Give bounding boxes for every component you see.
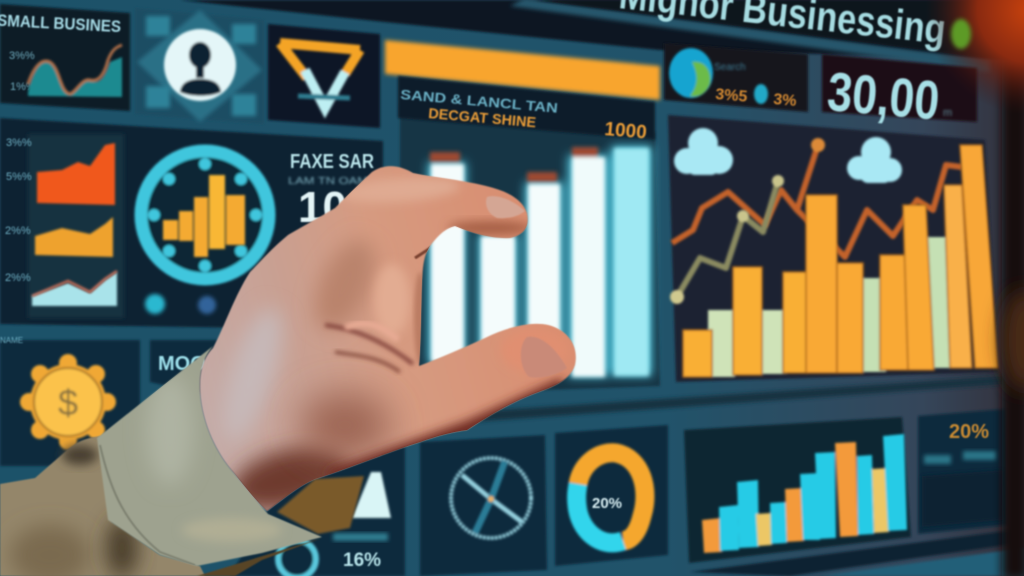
caption xyxy=(333,533,388,541)
panel: bar chart xyxy=(385,40,660,395)
panel: metric charts and gear xyxy=(0,118,383,330)
diamond ornament xyxy=(137,10,262,122)
orange heading band xyxy=(385,40,660,100)
bars xyxy=(702,434,907,553)
chart: yellow area xyxy=(35,217,113,257)
palm crease xyxy=(325,325,413,364)
hand shading xyxy=(209,174,569,521)
icon: green status dot xyxy=(951,19,971,49)
bar cluster in gear xyxy=(163,175,245,257)
chart: blue area trend line xyxy=(32,271,117,296)
side inner dark xyxy=(922,470,1004,527)
icon: thumb nail xyxy=(521,337,567,378)
chart: donut xyxy=(577,453,645,543)
sleeve body xyxy=(0,436,205,576)
right edge shade xyxy=(1002,60,1024,576)
cuff xyxy=(97,346,322,566)
shirt sleeve xyxy=(0,346,364,576)
big value: 30,00 xyxy=(825,60,942,132)
orange trend line xyxy=(672,138,962,257)
hand xyxy=(200,166,576,521)
axis labels column: 3%% xyxy=(6,137,32,149)
icon: progress ring xyxy=(278,540,316,576)
panel: mood label xyxy=(150,340,235,400)
icon: cloud left xyxy=(674,128,733,175)
panel: small percent xyxy=(230,445,405,576)
axis labels column: 2%% xyxy=(5,225,31,237)
chart subheading: SAND & LANCL TAN xyxy=(400,86,559,116)
heading: MOO xyxy=(158,353,206,375)
bars xyxy=(683,145,998,377)
sleeve lower shade xyxy=(10,525,90,576)
chart: blue area xyxy=(32,272,117,306)
globe label: Search xyxy=(714,62,746,73)
axis labels column xyxy=(5,137,32,284)
inner chart column xyxy=(28,134,124,318)
corner tile icons xyxy=(146,16,256,116)
axis labels column: 5%% xyxy=(6,171,32,183)
side value: 20% xyxy=(949,421,989,443)
bottom right dark gap xyxy=(690,530,1014,576)
side large number: 10 xyxy=(298,183,347,232)
panel: globe xyxy=(664,43,808,112)
chart value: 1000 xyxy=(604,119,648,144)
sleeve inner lining xyxy=(277,476,364,534)
icon: cloud right xyxy=(847,137,902,183)
panel: donut xyxy=(555,425,668,566)
percent value: 16% xyxy=(343,550,381,571)
title divider bar xyxy=(510,0,990,72)
sleeve underside xyxy=(197,538,322,576)
label: NAME xyxy=(0,336,23,345)
panel: triangle logo xyxy=(268,24,380,128)
icon: gauge dial xyxy=(451,458,531,538)
axis labels column: 2%% xyxy=(5,272,31,284)
donut value: 20% xyxy=(592,495,622,512)
icon: gear ring xyxy=(141,151,269,279)
khaki trend line xyxy=(670,175,784,304)
area line chart xyxy=(28,45,122,97)
status dots xyxy=(145,294,165,314)
icon: orange and white triangle xyxy=(280,43,360,108)
second axis label: 1%% xyxy=(10,81,36,93)
globe value right: 3% xyxy=(773,91,797,110)
panel: small bar chart xyxy=(684,417,911,563)
icon: cone xyxy=(352,472,391,518)
side label row xyxy=(924,451,996,464)
globe value left: 3%5 xyxy=(715,86,748,106)
panel: side metric xyxy=(918,409,1008,534)
panel: profile xyxy=(135,8,264,124)
icon: user avatar xyxy=(164,29,236,101)
panel: big number xyxy=(822,54,977,132)
dark top band xyxy=(180,0,1024,60)
panel heading: SMALL BUSINES xyxy=(0,11,121,36)
dark stripe below chart row xyxy=(470,376,1005,422)
value unit: m xyxy=(943,107,952,119)
panel: small business xyxy=(0,4,130,111)
chart: orange area xyxy=(37,143,115,205)
icon: dollar coin gear: $ xyxy=(58,382,78,423)
side text heading: FAXE SAR xyxy=(290,151,374,173)
title backdrop xyxy=(535,0,1000,58)
corner orange glow xyxy=(900,0,1024,130)
icon: index fingernail xyxy=(486,196,525,218)
side subheading: LAM TN OAM xyxy=(288,176,368,187)
sleeve fold pocket xyxy=(62,445,98,465)
cuff highlight xyxy=(100,375,282,565)
panel: gauge xyxy=(420,435,547,576)
icon: globe xyxy=(669,48,713,98)
globe mid dot xyxy=(754,84,768,104)
panel: main bar and line chart xyxy=(668,115,998,382)
chart orange subheading: DECGAT SHINE xyxy=(428,105,537,131)
lower right ambient xyxy=(1002,290,1024,390)
axis labels: 3%% xyxy=(9,50,35,62)
panel: revenue coin xyxy=(0,336,140,466)
text backdrop xyxy=(398,76,655,140)
bar glow xyxy=(428,146,652,377)
bottom right strip xyxy=(820,548,1024,576)
second status dot xyxy=(198,296,216,314)
white bars xyxy=(430,147,649,377)
sleeve shadow fold xyxy=(106,518,138,576)
